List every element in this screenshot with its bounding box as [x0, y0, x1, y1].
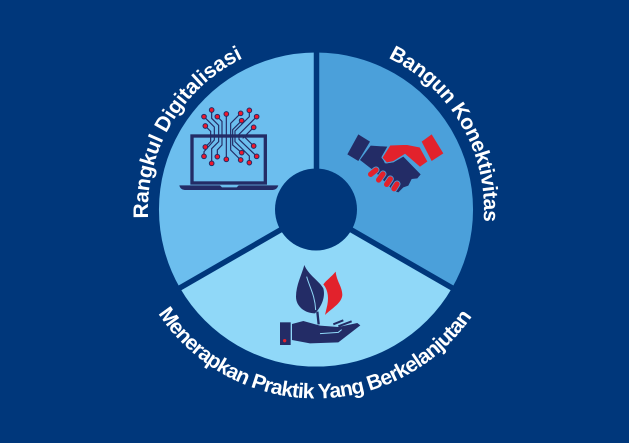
- icon: hand holding plant: [280, 265, 360, 345]
- panel: Bangun Konektivitas segment: [316, 52, 473, 288]
- panel: Rangkul Digitalisasi segment: [159, 52, 316, 288]
- label: Rangkul Digitalisasi: Rangkul Digitalisasi: [134, 45, 242, 218]
- label: Bangun Konektivitas: Bangun Konektivitas: [390, 46, 498, 221]
- center hole: [275, 168, 357, 250]
- panel: Menerapkan Praktik Yang Berkelanjutan segment: [180, 210, 452, 367]
- icon: handshake: [347, 134, 443, 192]
- icon: laptop with circuit: [179, 108, 278, 190]
- label: Menerapkan Praktik Yang Berkelanjutan: Menerapkan Praktik Yang Berkelanjutan: [158, 306, 472, 398]
